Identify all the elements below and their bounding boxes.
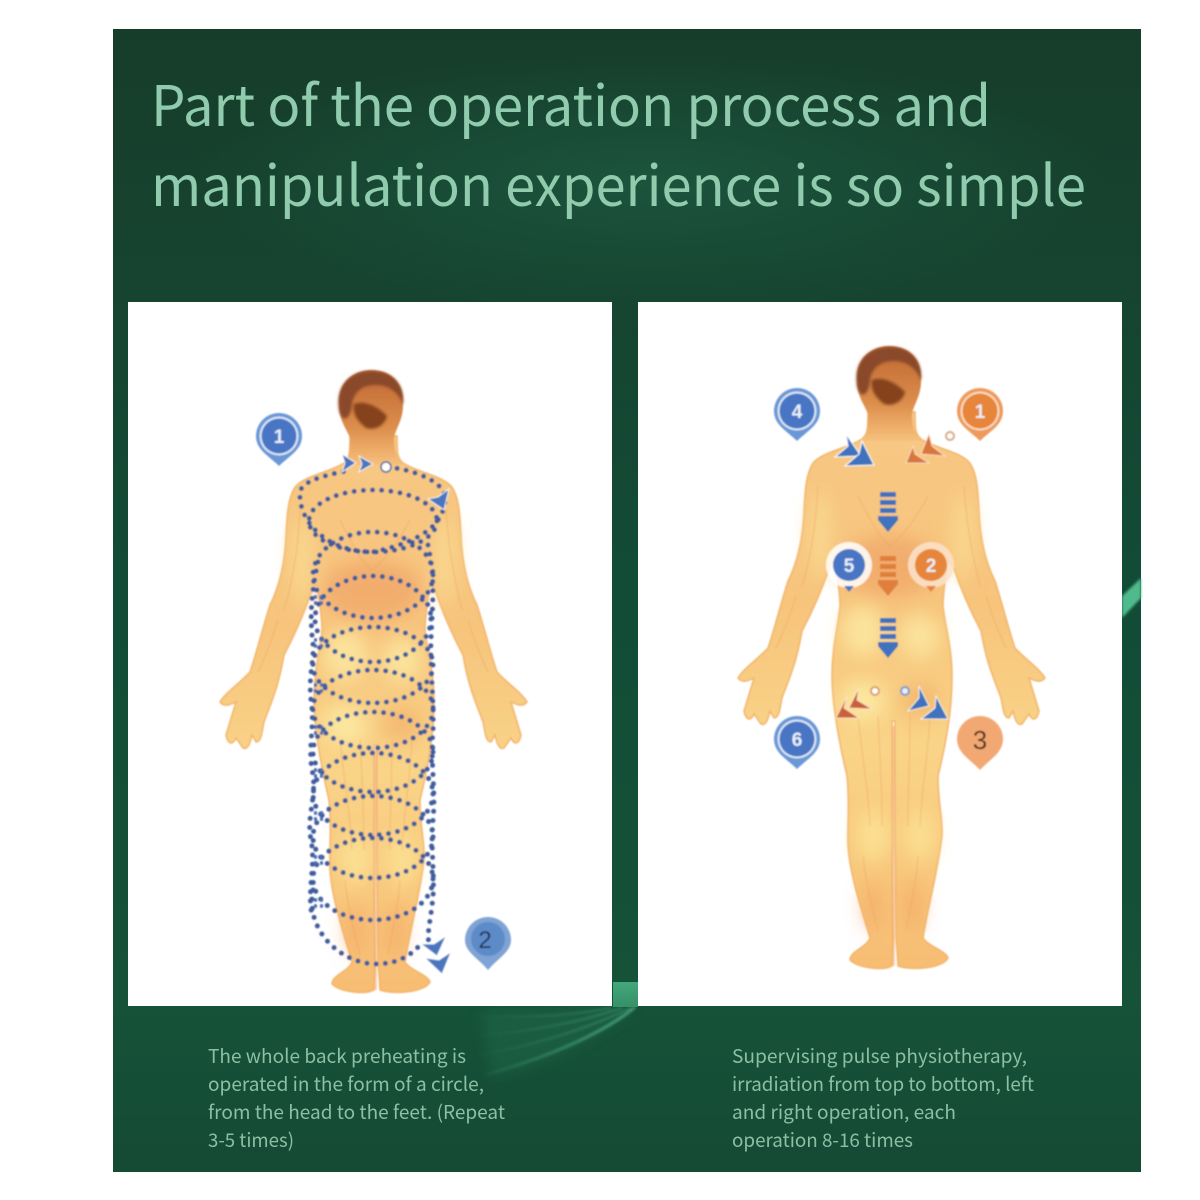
- pin 1 left: [256, 413, 302, 466]
- caption: left: The whole back preheating is: [208, 1042, 466, 1069]
- pin 1 left: 1: [274, 427, 285, 448]
- caption: right: operation 8-16 times: [732, 1126, 913, 1153]
- panel: right white card: [638, 302, 1122, 1006]
- pin 2: [908, 542, 954, 592]
- pin 5: [826, 542, 872, 592]
- orange shoulder chevrons: [906, 434, 945, 463]
- pin 2: 2: [926, 556, 936, 577]
- title: manipulation experience is so simple: [151, 142, 1086, 223]
- caption: right: Supervising pulse physiotherapy,: [732, 1042, 1027, 1069]
- dotted circular massage path: [300, 462, 445, 964]
- pin 6: 6: [792, 730, 802, 751]
- caption: left: from the head to the feet. (Repeat: [208, 1098, 505, 1125]
- body illustration right: [738, 346, 1045, 968]
- arrows: start and end of path: [342, 454, 451, 974]
- caption: left: [208, 1042, 505, 1153]
- pin 6: [774, 716, 820, 769]
- caption: left: 3-5 times): [208, 1126, 294, 1153]
- pin 3: 3: [973, 725, 987, 755]
- pin 4: 4: [792, 402, 803, 423]
- hip arrows: [836, 686, 948, 719]
- title: [151, 62, 1086, 223]
- pin 1: 1: [975, 402, 986, 423]
- small marker: shoulder: [946, 432, 954, 440]
- title: Part of the operation process and: [151, 62, 991, 143]
- body illustration left: [220, 370, 527, 992]
- pin 5: 5: [844, 556, 855, 577]
- pin 2 left: [465, 917, 511, 970]
- caption: right: irradiation from top to bottom, left: [732, 1070, 1034, 1097]
- caption: right: [732, 1042, 1034, 1153]
- down arrow middle orange: [878, 556, 898, 596]
- right figure: pulse physiotherapy points: [738, 346, 1045, 968]
- caption: left: operated in the form of a circle,: [208, 1070, 484, 1097]
- down arrow lower blue: [878, 618, 898, 658]
- pin 3: [957, 716, 1003, 770]
- panel: left white card: [128, 302, 612, 1006]
- pin 2 left: 2: [478, 927, 492, 954]
- light swoosh decoration: [470, 578, 1141, 1076]
- down arrow upper blue: [878, 492, 898, 532]
- left figure: back with circular preheating path: [220, 370, 527, 992]
- pin 1: [957, 388, 1003, 441]
- caption: right: and right operation, each: [732, 1098, 956, 1125]
- blue shoulder chevrons: [835, 434, 874, 466]
- pin 4: [774, 388, 820, 441]
